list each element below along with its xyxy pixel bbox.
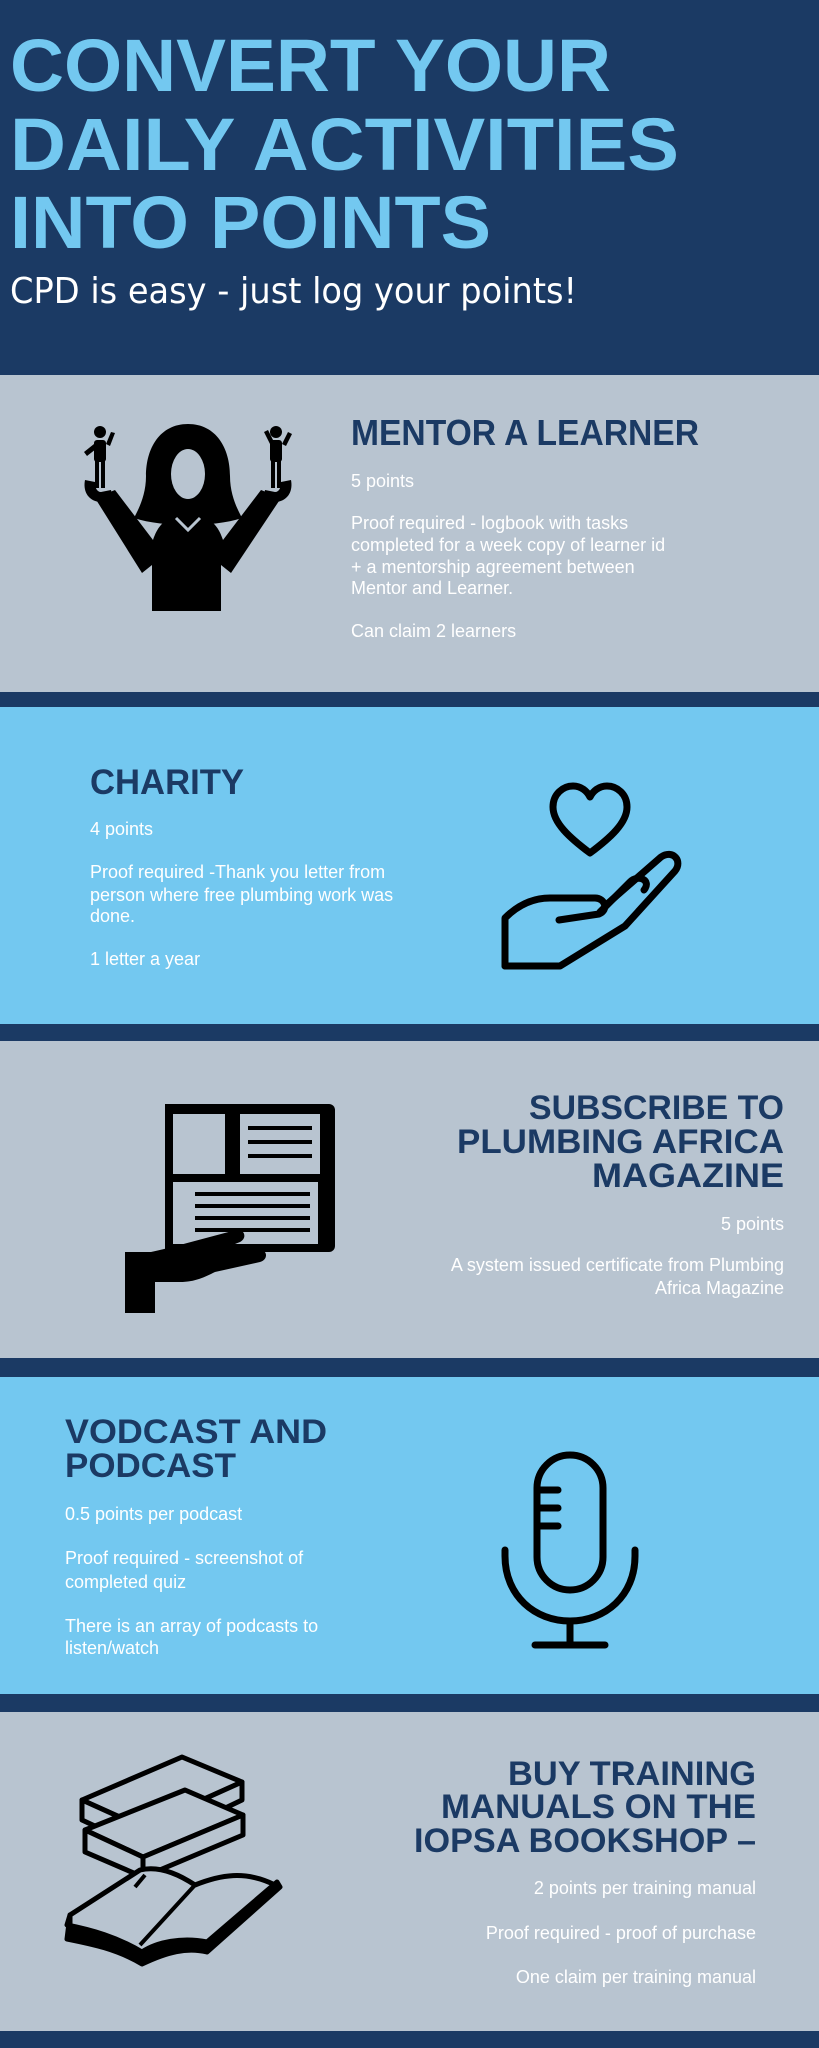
body text: Mentor and Learner.	[351, 578, 513, 598]
body text: + a mentorship agreement between	[351, 557, 635, 577]
body text: Africa Magazine	[655, 1278, 784, 1298]
body text: A system issued certificate from Plumbing	[451, 1255, 784, 1275]
panel: vodcast and podcast	[0, 1377, 819, 1694]
header	[10, 24, 679, 312]
body text: 0.5 points per podcast	[65, 1504, 242, 1524]
body text: One claim per training manual	[516, 1967, 756, 1987]
icon: microphone	[505, 1455, 635, 1645]
heading: IOPSA BOOKSHOP –	[414, 1822, 756, 1860]
body text: There is an array of podcasts to	[65, 1616, 318, 1636]
body text: person where free plumbing work was	[90, 885, 393, 905]
panel: charity	[0, 707, 819, 1024]
body text: completed quiz	[65, 1572, 186, 1592]
body text: done.	[90, 906, 135, 926]
panel: subscribe magazine	[0, 1041, 819, 1358]
body text: Proof required -Thank you letter from	[90, 862, 385, 882]
heading: PLUMBING AFRICA	[457, 1123, 784, 1161]
heading: BUY TRAINING	[508, 1755, 756, 1793]
body text	[351, 471, 665, 641]
body text: completed for a week copy of learner id	[351, 535, 665, 555]
heading: CHARITY	[90, 763, 244, 802]
heading	[414, 1755, 756, 1860]
panel: training manuals	[0, 1712, 819, 2031]
body text: Proof required - screenshot of	[65, 1548, 304, 1568]
panel: mentor a learner	[0, 375, 819, 692]
title: DAILY ACTIVITIES	[10, 103, 679, 186]
body text: 5 points	[721, 1214, 784, 1234]
heading: SUBSCRIBE TO	[529, 1089, 784, 1127]
body text	[90, 819, 393, 969]
body text	[451, 1214, 784, 1298]
body text: Can claim 2 learners	[351, 621, 516, 641]
title: INTO POINTS	[10, 181, 491, 264]
icon: books	[67, 1757, 280, 1964]
icon: heart in hand	[505, 786, 678, 966]
icon: magazine in hand	[125, 1104, 335, 1313]
body text	[486, 1878, 756, 1987]
body text: listen/watch	[65, 1638, 159, 1658]
body text: 1 letter a year	[90, 949, 200, 969]
body text: 5 points	[351, 471, 414, 491]
body text: Proof required - proof of purchase	[486, 1923, 756, 1943]
body text: 4 points	[90, 819, 153, 839]
heading: MANUALS ON THE	[441, 1788, 756, 1826]
body text	[65, 1504, 318, 1658]
title	[10, 24, 679, 264]
heading: MAGAZINE	[592, 1157, 784, 1195]
heading	[457, 1089, 784, 1195]
subtitle: CPD is easy - just log your points!	[10, 271, 577, 312]
body text: 2 points per training manual	[534, 1878, 756, 1898]
title: CONVERT YOUR	[10, 24, 611, 107]
heading: MENTOR A LEARNER	[351, 412, 699, 453]
heading	[65, 1413, 327, 1485]
heading: PODCAST	[65, 1447, 236, 1485]
heading: VODCAST AND	[65, 1413, 327, 1451]
body text: Proof required - logbook with tasks	[351, 513, 628, 533]
icon: mentor with learners	[84, 424, 292, 611]
